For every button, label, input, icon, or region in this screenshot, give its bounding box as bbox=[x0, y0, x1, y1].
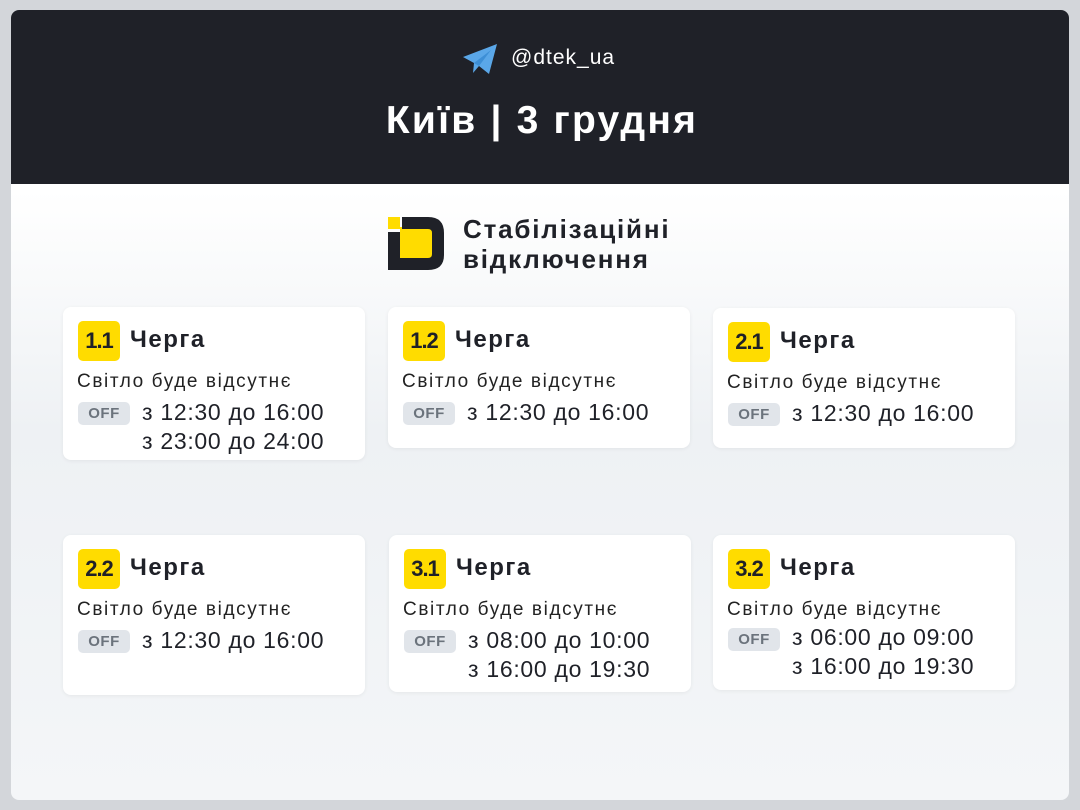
card 2.1: Черга bbox=[780, 327, 856, 354]
card 3.1: з 16:00 до 19:30 bbox=[468, 656, 650, 682]
card 1.1: OFF bbox=[88, 405, 120, 422]
card 3.2 bbox=[713, 535, 1015, 690]
card 2.2: OFF bbox=[88, 633, 120, 650]
card 1.2: Черга bbox=[455, 326, 531, 353]
card 1.2: 1.2 bbox=[410, 328, 438, 353]
handle: @dtek_ua bbox=[511, 46, 615, 69]
card 3.2: Черга bbox=[780, 554, 856, 581]
card 1.1 bbox=[63, 307, 365, 460]
card 3.1: Черга bbox=[456, 554, 532, 581]
card 1.1: з 23:00 до 24:00 bbox=[142, 428, 324, 454]
card 3.2: з 16:00 до 19:30 bbox=[792, 653, 974, 679]
card 1.1: Черга bbox=[130, 326, 206, 353]
card 3.1: 3.1 bbox=[411, 556, 439, 581]
card 1.1: з 12:30 до 16:00 bbox=[142, 399, 324, 425]
card 3.2: 3.2 bbox=[735, 556, 763, 581]
card 2.2: Черга bbox=[130, 554, 206, 581]
card 2.2: з 12:30 до 16:00 bbox=[142, 627, 324, 653]
title: Київ | 3 грудня bbox=[386, 99, 698, 142]
subtitle: Стабілізаційні bbox=[463, 214, 670, 244]
card 1.2: з 12:30 до 16:00 bbox=[467, 399, 649, 425]
card 3.1: з 08:00 до 10:00 bbox=[468, 627, 650, 653]
card 1.1: Світло буде відсутнє bbox=[77, 371, 292, 392]
card 2.2: Світло буде відсутнє bbox=[77, 599, 292, 620]
card 2.2: 2.2 bbox=[85, 556, 113, 581]
card 2.1: з 12:30 до 16:00 bbox=[792, 400, 974, 426]
card 1.1: 1.1 bbox=[85, 328, 113, 353]
card 3.1: OFF bbox=[414, 633, 446, 650]
card 3.2: OFF bbox=[738, 631, 770, 648]
card 1.2 bbox=[388, 307, 690, 448]
card 3.1 bbox=[389, 535, 691, 692]
card 1.2: Світло буде відсутнє bbox=[402, 371, 617, 392]
card 2.2 bbox=[63, 535, 365, 695]
card 2.1: OFF bbox=[738, 406, 770, 423]
subtitle bbox=[463, 214, 670, 274]
card 1.2: OFF bbox=[413, 405, 445, 422]
card 2.1 bbox=[713, 308, 1015, 448]
card 3.2: Світло буде відсутнє bbox=[727, 599, 942, 620]
card 2.1: Світло буде відсутнє bbox=[727, 372, 942, 393]
card 3.1: Світло буде відсутнє bbox=[403, 599, 618, 620]
subtitle: відключення bbox=[463, 244, 650, 274]
logo bbox=[388, 217, 444, 270]
header bbox=[11, 10, 1069, 184]
card 3.2: з 06:00 до 09:00 bbox=[792, 624, 974, 650]
card 2.1: 2.1 bbox=[735, 329, 763, 354]
icon: telegram bbox=[463, 44, 497, 74]
